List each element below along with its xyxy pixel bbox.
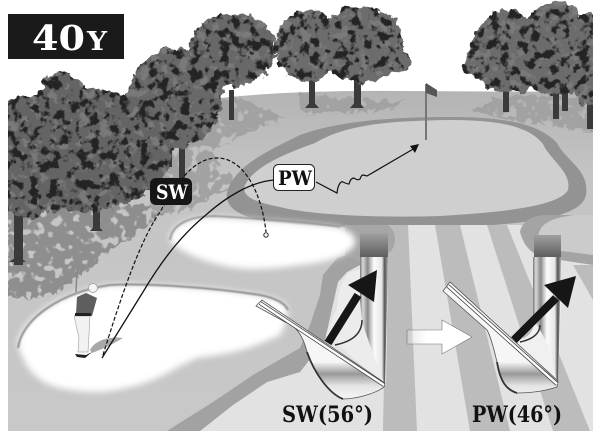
caption: PW loft: PW(46°) — [472, 402, 562, 428]
ball — [264, 233, 268, 237]
caption: SW loft: SW(56°) — [282, 402, 373, 428]
hosel shading — [360, 233, 388, 258]
PW trajectory solid — [102, 180, 274, 358]
lower bunker — [18, 285, 288, 392]
topline — [448, 286, 557, 384]
back tree canopy — [189, 13, 275, 87]
PW roll arrow — [316, 144, 419, 193]
club — [76, 270, 77, 292]
upper bunker — [170, 216, 355, 269]
arrow — [514, 276, 576, 340]
shaft — [360, 257, 388, 385]
sole edge — [307, 352, 343, 399]
trees: left group — [0, 13, 275, 265]
golfer shadow — [90, 338, 123, 353]
fairway stripes — [200, 225, 593, 431]
trees: centre group — [275, 6, 411, 108]
head — [256, 300, 385, 399]
tree trunks left — [9, 90, 234, 265]
front tree canopy — [0, 73, 172, 218]
topline — [260, 303, 384, 385]
SW trajectory dashed — [103, 158, 266, 355]
inner curve — [335, 320, 362, 345]
club: SW — [256, 233, 388, 399]
back flange — [513, 300, 561, 385]
hosel shading — [534, 235, 561, 258]
inner curve — [520, 325, 540, 342]
putting green with fringe — [227, 117, 586, 228]
right green patch — [520, 215, 593, 265]
distance badge: 40 — [32, 18, 85, 59]
shaft — [533, 257, 561, 385]
shirt — [76, 293, 97, 316]
sole edge — [497, 362, 517, 393]
legs — [74, 316, 90, 352]
ground — [8, 91, 593, 431]
tree shadows — [8, 93, 593, 300]
belt — [75, 313, 91, 316]
fairway edge fringe — [167, 250, 360, 431]
cap — [88, 284, 98, 292]
trees: right group — [464, 3, 600, 129]
golfer — [74, 270, 123, 358]
back flange — [326, 262, 388, 385]
arrow — [328, 270, 377, 343]
middle tree canopy — [128, 48, 225, 148]
PW label: PW — [278, 166, 312, 190]
club: PW — [443, 235, 576, 393]
fringe blob at hosel — [345, 225, 395, 255]
white arrow — [407, 320, 472, 354]
distance badge — [8, 14, 124, 59]
flag — [425, 83, 437, 140]
shoes — [75, 352, 92, 358]
head — [443, 282, 558, 393]
distance badge: Y — [86, 27, 107, 57]
SW label: SW — [156, 180, 188, 204]
